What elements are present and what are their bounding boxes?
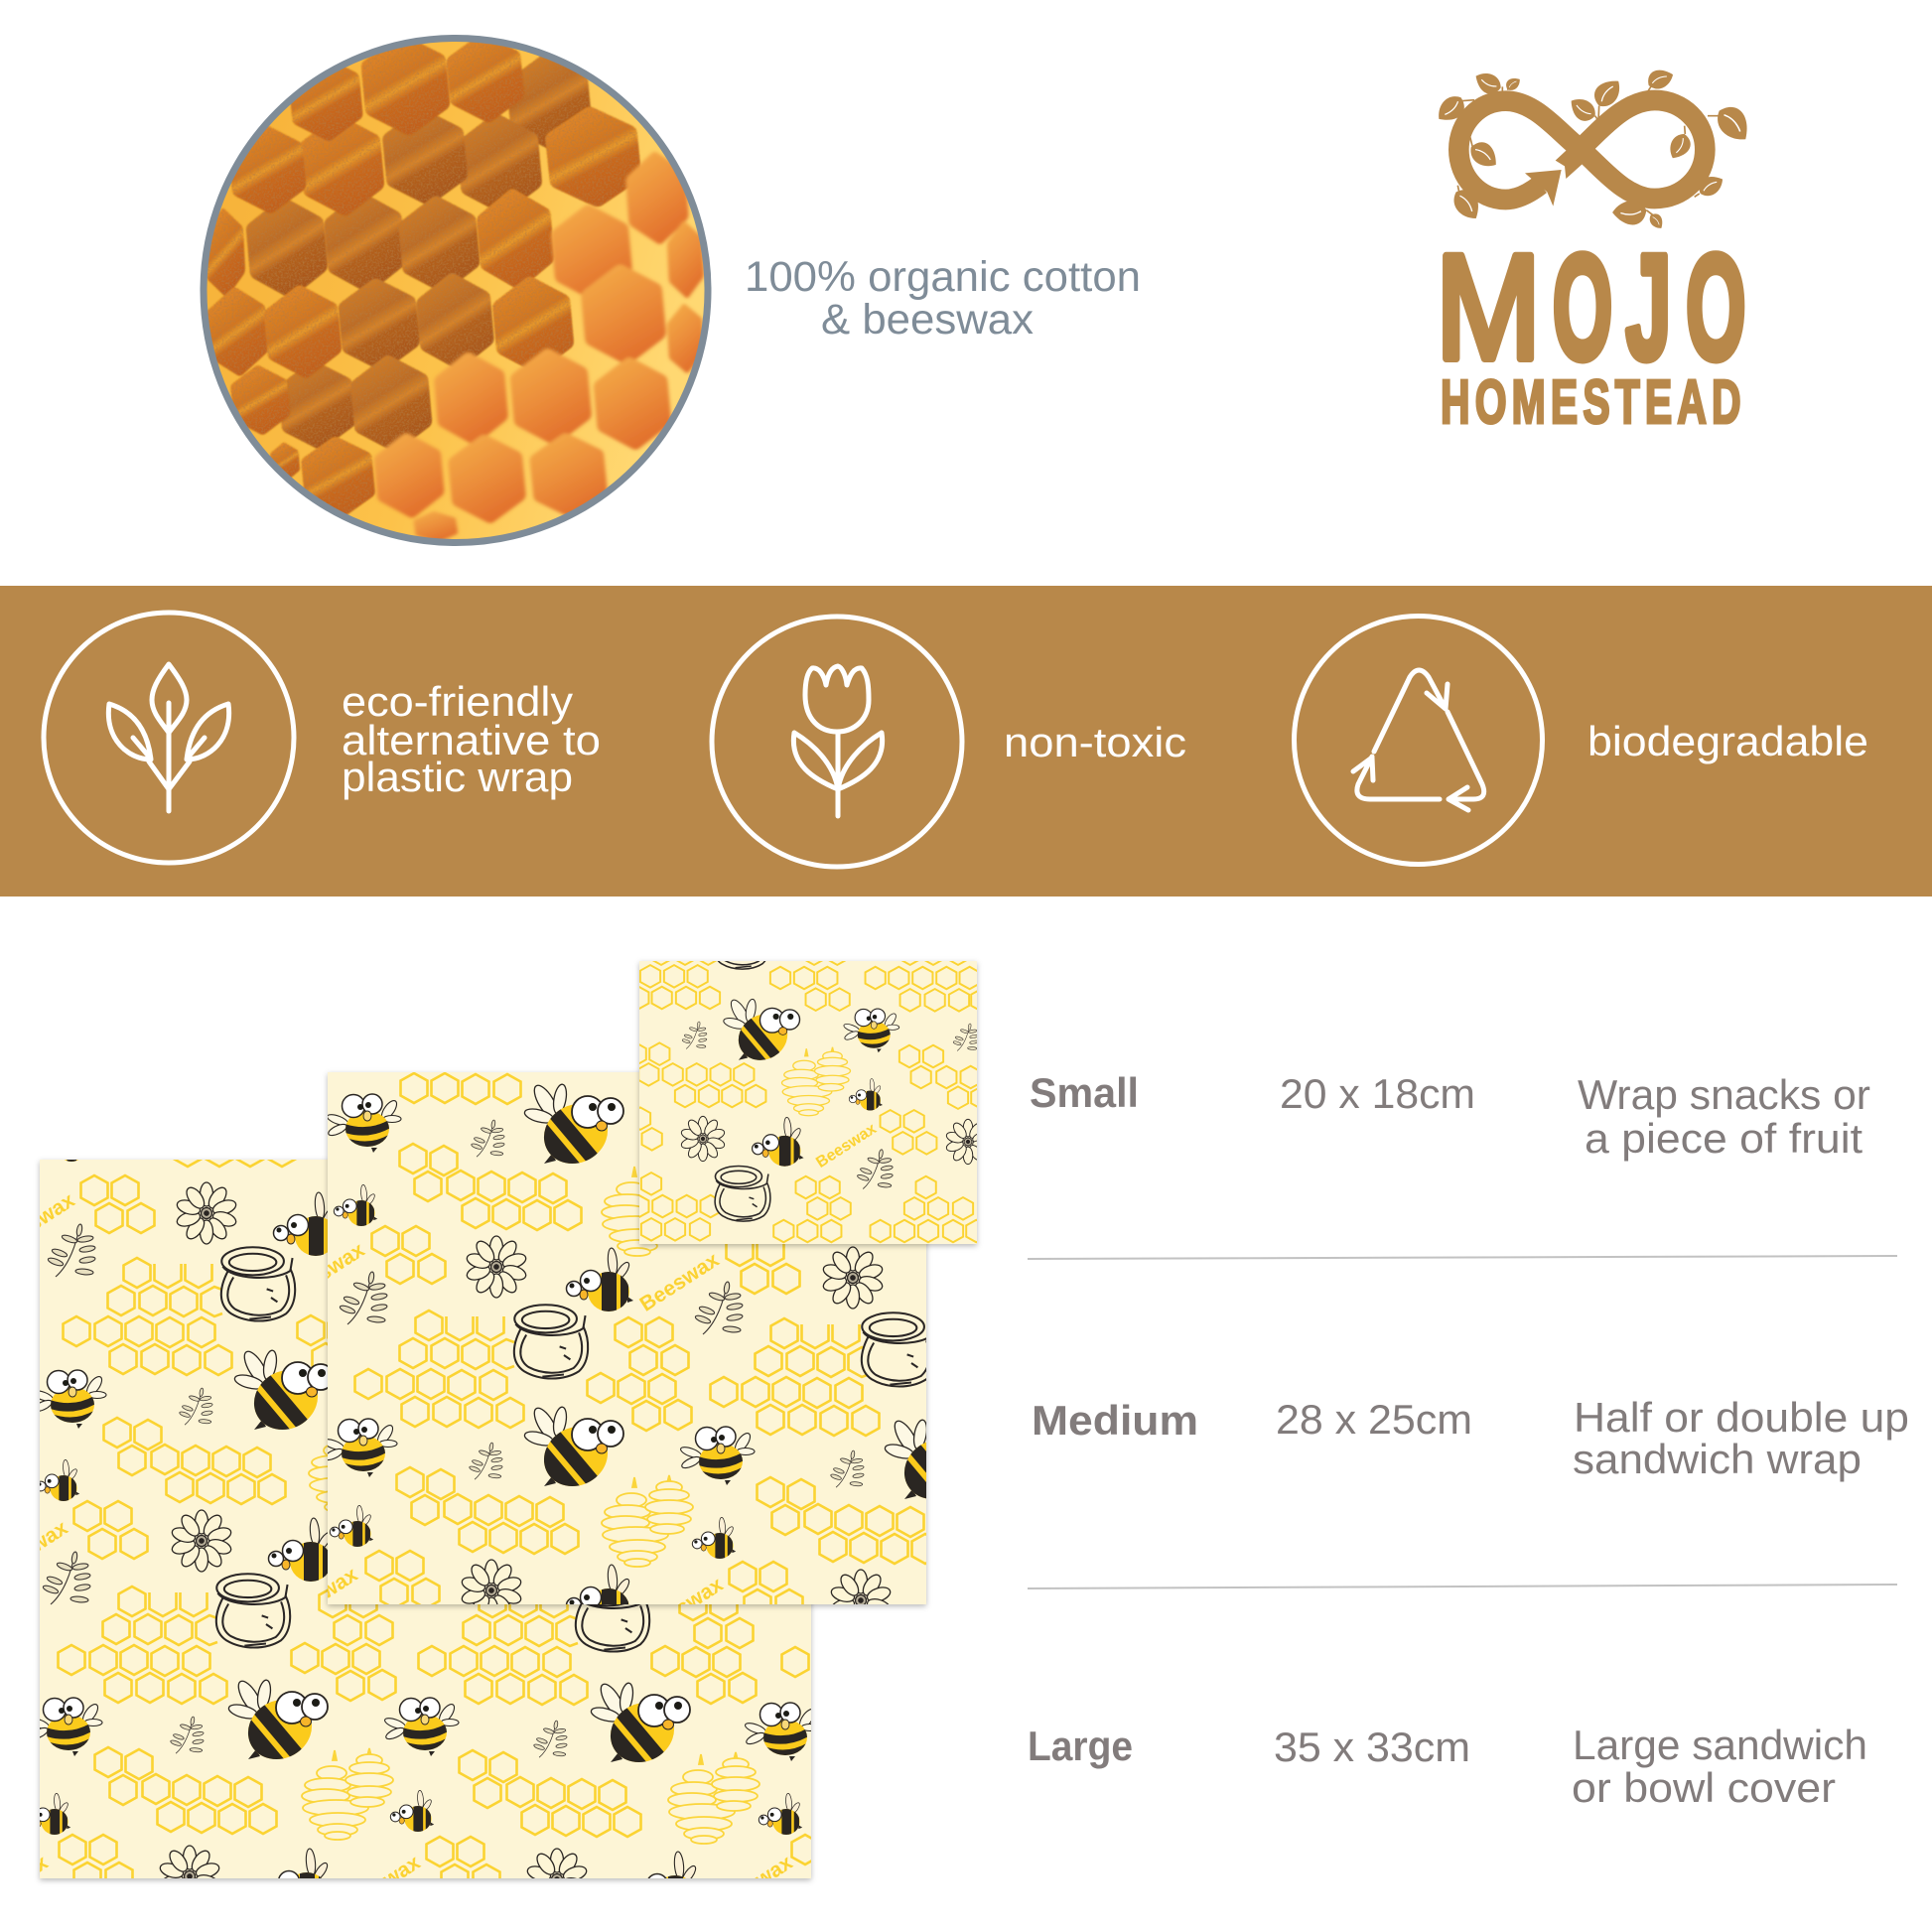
size table: large row: Large xyxy=(1028,1723,1133,1769)
size table: small row: 20 x 18cm xyxy=(1280,1070,1475,1117)
size table: medium row: Half or double up xyxy=(1574,1394,1909,1441)
jars xyxy=(216,1247,649,1652)
text: eco-friendly xyxy=(342,678,601,800)
hives xyxy=(302,1426,759,1844)
logo wordmark: MOJO: O xyxy=(1686,225,1746,391)
hive xyxy=(782,1047,850,1116)
hive xyxy=(602,1475,693,1567)
Beeswax labels on medium wrap: Beeswax xyxy=(639,1573,728,1641)
panel: large wrap xyxy=(36,1158,814,1884)
size table: large row xyxy=(1028,1722,1867,1811)
Beeswax label on small wrap: Beeswax xyxy=(813,1120,880,1172)
size table: large row: or bowl cover xyxy=(1572,1764,1836,1811)
size table: medium row: 28 x 25cm xyxy=(1276,1396,1472,1443)
text: eco-friendly: plastic wrap xyxy=(342,754,573,800)
hive behind small wrap xyxy=(601,1166,658,1257)
Beeswax labels on medium wrap xyxy=(274,1238,728,1641)
flowers and sprigs xyxy=(340,1120,892,1631)
panel: medium wrap xyxy=(324,1070,929,1610)
material caption xyxy=(745,253,1141,344)
hexagon pattern xyxy=(58,1137,951,1894)
size table: small row: Wrap snacks or xyxy=(1578,1071,1870,1118)
icon: plant in circle xyxy=(44,613,294,863)
jars xyxy=(714,961,771,1222)
Beeswax labels on large wrap: Beeswax xyxy=(337,1851,425,1919)
bees xyxy=(322,1082,984,1635)
size table: medium row: Medium xyxy=(1032,1397,1198,1444)
material caption: & beeswax xyxy=(821,296,1035,344)
flowers and sprigs xyxy=(43,1182,588,1910)
text: biodegradable: biodegradable xyxy=(1587,718,1868,764)
icon: recycle triangle in circle xyxy=(1295,616,1543,864)
Beeswax labels on medium wrap: Beeswax xyxy=(281,1238,369,1307)
icon: tulip in circle xyxy=(712,617,962,867)
size table: small row: a piece of fruit xyxy=(1585,1115,1863,1162)
logo wordmark: HOMESTEAD: HOMESTEAD xyxy=(1441,368,1746,437)
bees xyxy=(712,998,899,1172)
logo wordmark: MOJO xyxy=(1436,223,1746,391)
size table: large row: 35 x 33cm xyxy=(1274,1724,1470,1770)
Beeswax labels on medium wrap: Beeswax xyxy=(274,1563,362,1631)
text: eco-friendly: alternative to xyxy=(342,717,601,763)
size table: small row xyxy=(1030,1069,1870,1162)
hexagon pattern xyxy=(639,961,977,1243)
logo: Mojo Homestead xyxy=(1433,65,1757,437)
size table: small row: Small xyxy=(1030,1069,1139,1116)
logo wordmark: MOJO: M xyxy=(1436,224,1541,390)
Beeswax labels on large wrap: Beeswax xyxy=(709,1851,797,1919)
flowers and sprigs xyxy=(680,1022,991,1189)
Beeswax labels on large wrap xyxy=(0,1188,797,1919)
logo wordmark: MOJO: J xyxy=(1626,223,1671,390)
honeycomb photo circle xyxy=(189,25,725,561)
panel: small wrap xyxy=(635,959,981,1249)
size table: large row: Large sandwich xyxy=(1573,1722,1867,1768)
size table: medium row xyxy=(1032,1394,1909,1482)
logo icon: infinity vine xyxy=(1433,65,1757,231)
material caption: 100% organic cotton xyxy=(745,253,1141,301)
panel: benefits band xyxy=(0,586,1932,897)
text: eco-friendly: eco-friendly xyxy=(342,678,573,725)
text: non-toxic: non-toxic xyxy=(1004,719,1186,765)
Beeswax labels on medium wrap: Beeswax xyxy=(635,1248,724,1316)
logo wordmark: MOJO: O xyxy=(1553,225,1612,391)
bees xyxy=(27,1120,819,1922)
hexagon pattern xyxy=(355,1073,939,1619)
size table: medium row: sandwich wrap xyxy=(1573,1436,1862,1482)
jars xyxy=(514,1305,935,1387)
